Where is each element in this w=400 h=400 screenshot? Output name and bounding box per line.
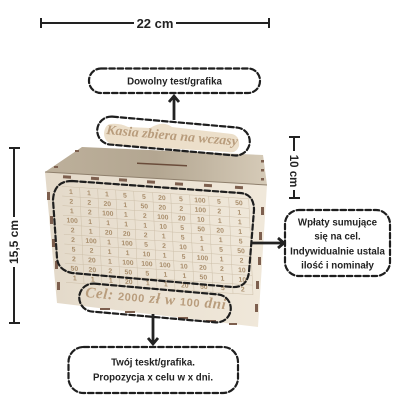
number grid: 1 xyxy=(162,252,167,260)
number grid: 1 xyxy=(109,278,113,285)
number grid: 5 xyxy=(221,285,225,292)
number grid: 2 xyxy=(108,268,113,275)
dimension: depth 10 cm: 10 cm xyxy=(287,155,299,187)
number grid: 2 xyxy=(239,258,244,265)
callout: side note: się na cel. xyxy=(314,232,361,242)
plaque script text: Kasia zbiera na wczasy xyxy=(105,122,240,149)
number grid: 1 xyxy=(200,236,204,243)
number grid: 1 xyxy=(105,191,109,199)
number grid: 2 xyxy=(72,256,76,263)
number grid: 2 xyxy=(144,232,148,239)
box top xyxy=(45,147,267,185)
number grid: 1 xyxy=(218,218,222,225)
number grid: 1 xyxy=(182,273,187,280)
number grid: 10 xyxy=(238,267,246,275)
number grid: 1 xyxy=(108,258,112,266)
number grid: 5 xyxy=(144,242,148,249)
number grid: 50 xyxy=(140,203,149,211)
number grid: 100 xyxy=(159,262,171,270)
dashed outline: plaque xyxy=(96,115,251,157)
number grid: 5 xyxy=(142,194,146,201)
number grid: 1 xyxy=(124,221,128,228)
number grid: 100 xyxy=(66,217,78,225)
number grid: 50 xyxy=(235,200,243,207)
number grid: 2 xyxy=(69,198,74,206)
number grid: 1 xyxy=(91,276,95,284)
number grid: 2 xyxy=(241,286,245,294)
number grid: 10 xyxy=(180,263,188,271)
number grid: 5 xyxy=(181,235,185,242)
number grid: 1 xyxy=(162,233,166,241)
number grid: 20 xyxy=(103,201,112,208)
arrow: right to side callout xyxy=(252,238,284,248)
number grid: 1 xyxy=(107,249,112,256)
number grid: 1 xyxy=(238,219,242,226)
dashed outline: goal text xyxy=(78,282,232,324)
number grid: 50 xyxy=(237,248,245,255)
number grid: 1 xyxy=(124,212,128,219)
number grid: 5 xyxy=(219,247,223,254)
number grid: 1 xyxy=(238,229,242,236)
number grid: 10 xyxy=(197,216,205,224)
number grid: 1 xyxy=(69,189,73,196)
side tabs xyxy=(47,192,264,312)
arrow: down to bottom callout xyxy=(148,314,158,344)
callout: bottom note: Propozycja x celu w x dni. xyxy=(93,372,213,384)
number grid: 20 xyxy=(88,257,96,265)
number grid: 5 xyxy=(239,238,243,246)
number grid: 100 xyxy=(195,207,206,214)
wooden box xyxy=(45,147,267,327)
top panel tabs xyxy=(54,150,264,180)
number grid: 50 xyxy=(124,269,133,277)
number grid: 1 xyxy=(220,275,225,283)
number grid: 1 xyxy=(237,210,242,217)
wooden name plaque xyxy=(104,122,240,152)
number grid: 5 xyxy=(217,199,221,206)
number grid: 2 xyxy=(143,213,147,220)
number grid: 1 xyxy=(87,190,91,197)
number grid: 1 xyxy=(200,245,204,253)
number grid: 2 xyxy=(89,248,94,255)
number grid: 1 xyxy=(219,237,223,244)
number grid: 10 xyxy=(159,224,167,231)
callout: top label xyxy=(89,68,260,93)
number grid: 5 xyxy=(145,271,150,278)
number grid: 5 xyxy=(180,225,184,232)
number grid: 5 xyxy=(179,196,183,203)
number grid: 1 xyxy=(143,223,147,230)
number grid: 20 xyxy=(199,264,207,272)
number grid: 100 xyxy=(141,261,153,268)
box front xyxy=(45,172,267,327)
callout: side note: ilość i nominały xyxy=(301,260,374,272)
dimension: width 22 cm xyxy=(41,16,269,31)
number grid: 2 xyxy=(220,266,224,273)
callout: top label: Dowolny test/grafika xyxy=(127,76,222,88)
number grid: 5 xyxy=(71,246,76,254)
number grid: 20 xyxy=(125,279,133,286)
callout: side note xyxy=(285,210,390,276)
number grid: 100 xyxy=(102,210,114,218)
number grid: 1 xyxy=(73,275,77,283)
dimension: height 15,5 cm: 15,5 cm xyxy=(7,220,21,264)
number grid: 20 xyxy=(88,267,97,274)
number grid: 100 xyxy=(122,259,134,267)
number grid: 50 xyxy=(197,226,205,234)
number grid: 1 xyxy=(70,208,74,215)
number grid: 1 xyxy=(125,250,130,257)
number grid: 1 xyxy=(123,202,128,209)
dimension: depth 10 cm xyxy=(287,137,300,198)
callout: bottom note xyxy=(68,347,238,393)
number grid: 2 xyxy=(71,227,75,235)
number grid: 10 xyxy=(143,251,151,259)
number grid: 100 xyxy=(121,240,133,248)
number grid: 50 xyxy=(200,284,208,291)
number grid: 20 xyxy=(105,230,113,237)
number grid: 20 xyxy=(158,195,166,202)
bottom edge tabs xyxy=(100,308,237,325)
number grid: 1 xyxy=(163,272,168,279)
dimension: height 15,5 cm xyxy=(7,148,21,323)
number grid: 10 xyxy=(179,244,187,252)
number grid: 2 xyxy=(162,243,166,250)
number grid: 5 xyxy=(123,192,127,200)
coin slot xyxy=(137,162,187,166)
number grid: 1 xyxy=(146,280,150,287)
number grid: 50 xyxy=(199,274,208,282)
number grid: 1 xyxy=(219,256,224,264)
number grid: 5 xyxy=(181,254,186,261)
number grid: 2 xyxy=(217,208,222,216)
number grid: 20 xyxy=(181,282,189,290)
number grid: 2 xyxy=(88,209,92,217)
number grid xyxy=(62,186,253,295)
number grid: 100 xyxy=(194,197,206,205)
number grid: 20 xyxy=(123,231,131,238)
number grid: 1 xyxy=(107,239,111,247)
number grid: 2 xyxy=(71,237,75,244)
callout: bottom note: Twój teskt/grafika. xyxy=(111,358,195,368)
number grid: 2 xyxy=(179,206,184,213)
number grid: 1 xyxy=(88,219,92,226)
number grid: 1 xyxy=(89,228,93,236)
number grid: 20 xyxy=(158,204,167,212)
dashed outline: number grid xyxy=(53,181,254,287)
number grid: 1 xyxy=(164,281,168,289)
number grid: 10 xyxy=(238,277,247,284)
number grid: 100 xyxy=(197,255,209,262)
number grid: 50 xyxy=(70,266,79,273)
callout: side note: Wpłaty sumujące xyxy=(298,218,378,228)
number grid: 20 xyxy=(216,227,224,235)
number grid: 2 xyxy=(87,200,92,207)
callout: side note: Indywidualnie ustala xyxy=(290,246,385,258)
number grid: 20 xyxy=(178,215,186,223)
top edge tabs xyxy=(63,175,243,189)
dimension: width 22 cm: 22 cm xyxy=(137,16,173,31)
number grid: 100 xyxy=(85,238,97,246)
number grid: 100 xyxy=(157,214,169,222)
goal script text: Cel: 2000 zł w 100 dni xyxy=(85,285,227,313)
arrow: up to top label xyxy=(169,96,179,120)
number grid: 1 xyxy=(106,220,110,227)
